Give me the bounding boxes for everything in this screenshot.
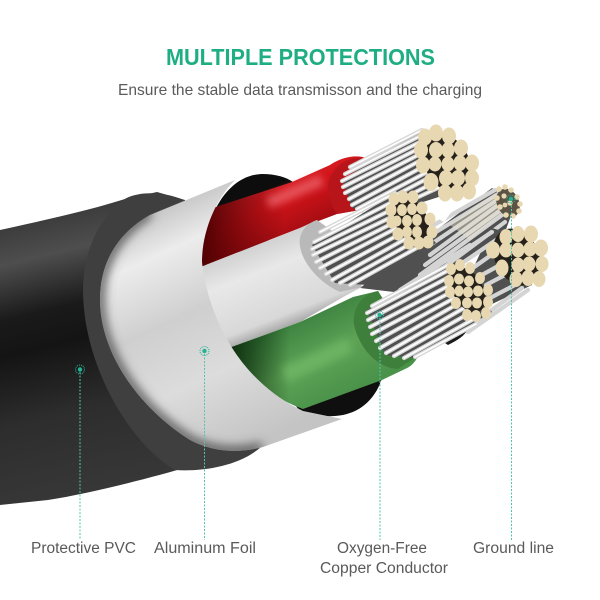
cable illustration bbox=[0, 124, 551, 505]
strands bbox=[400, 190, 506, 290]
callout: Protective PVC bbox=[31, 365, 136, 557]
translucent highlight bbox=[450, 193, 505, 240]
strand highlights bbox=[342, 130, 440, 214]
callout: Ground line bbox=[473, 195, 554, 557]
red sleeve cup bbox=[328, 158, 366, 214]
red highlight bbox=[268, 180, 322, 203]
copper face bbox=[483, 220, 551, 294]
face backing bbox=[443, 262, 493, 318]
strand highlights bbox=[312, 193, 422, 285]
foil edge shading bbox=[100, 213, 262, 451]
strands bbox=[450, 232, 528, 332]
label: Ground line bbox=[473, 540, 554, 557]
strands bbox=[342, 130, 440, 214]
title: MULTIPLE PROTECTIONS bbox=[166, 44, 435, 70]
white sleeve bbox=[198, 220, 362, 349]
face backing bbox=[386, 191, 436, 249]
marker dot bbox=[376, 311, 384, 319]
face backing bbox=[483, 220, 551, 294]
red sleeve bbox=[198, 156, 366, 268]
copper face bbox=[443, 259, 493, 322]
white gap highlight bbox=[434, 203, 458, 222]
red sleeve shadow bbox=[198, 182, 292, 268]
strand bundle: green wire bbox=[367, 259, 493, 358]
strands body bbox=[342, 130, 445, 214]
strands body bbox=[367, 263, 492, 358]
copper face bbox=[413, 124, 481, 202]
dark cavity bottom bbox=[295, 378, 382, 416]
strand bundle: right wire bbox=[405, 220, 551, 345]
callout: Oxygen-Free Copper Conductor bbox=[320, 311, 448, 577]
face backing bbox=[492, 185, 524, 221]
leader line bbox=[204, 354, 206, 540]
green highlight bbox=[285, 345, 350, 375]
strands body bbox=[360, 188, 515, 295]
dark gap under green strands bbox=[445, 328, 468, 345]
green sleeve shadow bbox=[226, 324, 296, 409]
strand bundle: white wire bbox=[312, 190, 438, 285]
strand bundle: rear ground wire bbox=[360, 184, 524, 295]
jacket cut collar bbox=[83, 193, 265, 470]
aluminum foil bbox=[100, 180, 342, 451]
label: Aluminum Foil bbox=[154, 540, 256, 557]
marker dot bbox=[507, 195, 515, 203]
dark cavity top bbox=[205, 174, 293, 260]
red insulated wire bbox=[198, 156, 366, 268]
label: Oxygen-Free bbox=[337, 540, 427, 557]
leader line bbox=[379, 318, 381, 540]
strand bundle: red wire bbox=[342, 124, 481, 214]
marker dot bbox=[200, 346, 209, 356]
label: Protective PVC bbox=[31, 540, 136, 557]
foil surface bbox=[100, 180, 342, 451]
strand highlights bbox=[367, 265, 476, 358]
copper strands bbox=[386, 190, 438, 250]
green sleeve bbox=[226, 291, 418, 409]
strands bbox=[312, 193, 422, 285]
copper strands bbox=[494, 184, 523, 219]
black outer jacket bbox=[0, 192, 265, 505]
green insulated wire bbox=[226, 291, 418, 409]
white sleeve cup bbox=[300, 220, 362, 292]
marker dot bbox=[76, 365, 84, 374]
copper strands bbox=[486, 226, 548, 287]
leader line bbox=[79, 372, 81, 540]
leader line bbox=[510, 202, 512, 540]
copper strands bbox=[414, 124, 479, 202]
green sleeve cup bbox=[354, 291, 418, 369]
face backing bbox=[413, 125, 481, 201]
label: Copper Conductor bbox=[320, 560, 448, 577]
white insulated wire bbox=[198, 220, 362, 349]
strands body bbox=[405, 228, 532, 345]
strands body bbox=[312, 195, 436, 285]
small copper face bbox=[492, 184, 524, 221]
copper face bbox=[386, 190, 438, 250]
subtitle: Ensure the stable data transmisson and the charging bbox=[118, 82, 482, 99]
callout: Aluminum Foil bbox=[154, 346, 256, 557]
copper strands bbox=[444, 259, 493, 322]
strands bbox=[367, 265, 476, 358]
